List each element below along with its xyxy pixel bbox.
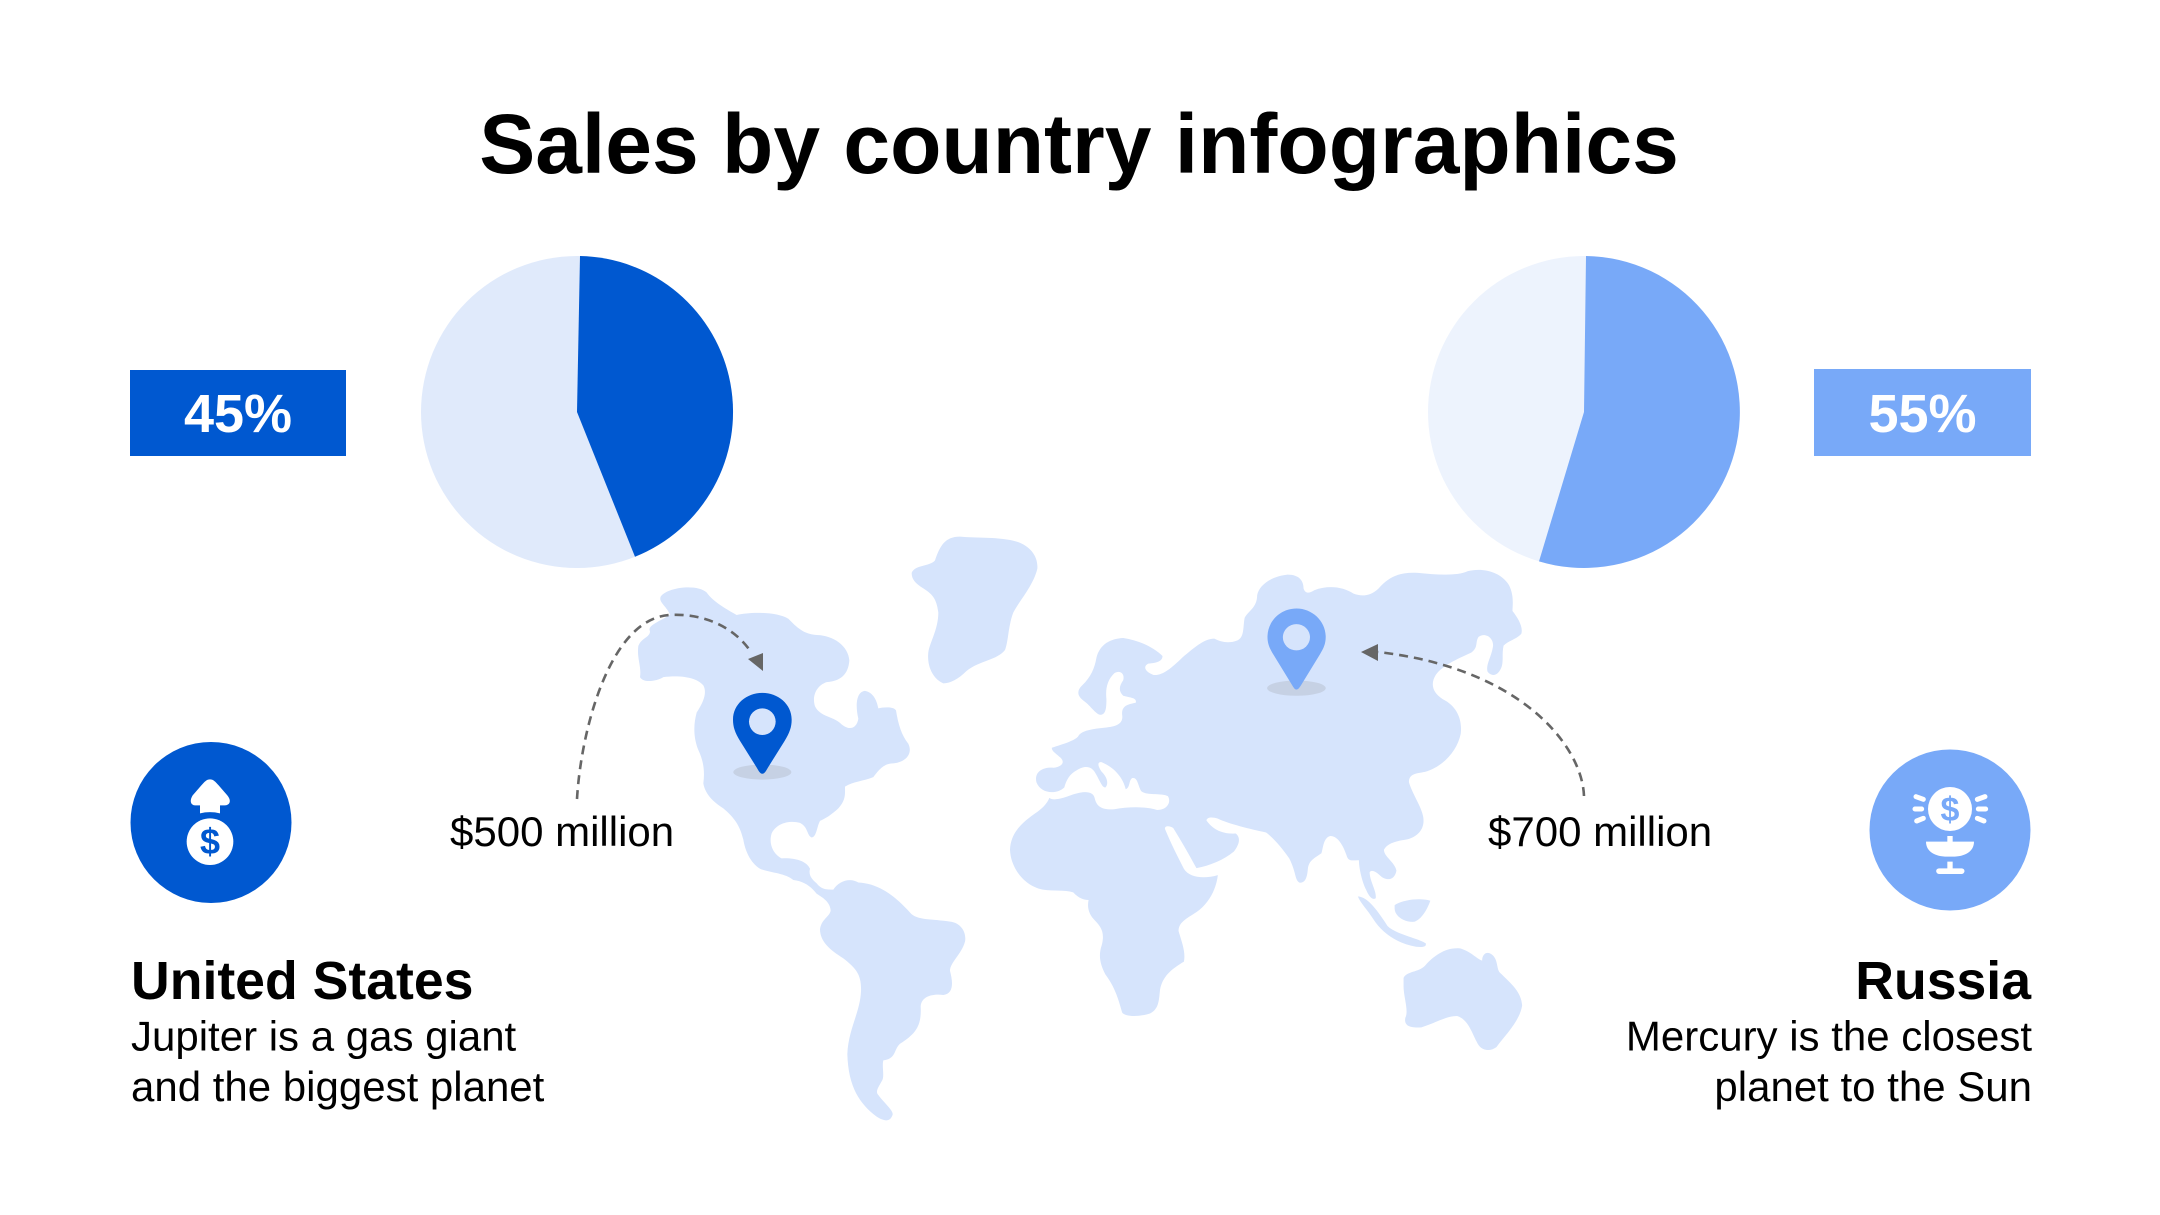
- percentage badge: 45%: [130, 370, 346, 456]
- icon: money arrow up: [130, 742, 292, 903]
- percentage badge: 55%: 55%: [1868, 384, 1977, 444]
- icon: money plant: $: [1941, 791, 1960, 829]
- pie chart: Russia 55%: [1428, 256, 1740, 568]
- label: $700 million: $700 million: [1488, 808, 1712, 855]
- percentage badge: 45%: 45%: [184, 384, 292, 444]
- text block: Russia: [1626, 951, 2032, 1110]
- world map: [638, 537, 1522, 1120]
- percentage badge: 55%: [1814, 369, 2031, 456]
- arrow: $700 million to Russia pin: [1361, 644, 1584, 796]
- arrow: $500 million to United States pin: [577, 615, 763, 799]
- label: $500 million: $500 million: [450, 808, 674, 855]
- map: Americas: [638, 587, 965, 1120]
- map pin: Russia: [1267, 609, 1326, 696]
- icon: money arrow up: $: [200, 821, 220, 862]
- text block: United States: [131, 951, 545, 1110]
- icon: money plant: [1870, 750, 2030, 910]
- map: Indonesia: [1358, 897, 1426, 947]
- text block: United States: Jupiter is a gas giant: [131, 1012, 517, 1060]
- text block: Russia: Mercury is the closest: [1626, 1012, 2032, 1060]
- title: Sales by country infographics: [479, 97, 1679, 191]
- map: Greenland: [912, 537, 1037, 683]
- map: Borneo: [1395, 899, 1430, 922]
- text block: United States: United States: [131, 951, 473, 1011]
- text block: Russia: planet to the Sun: [1714, 1063, 2032, 1110]
- map: Australia: [1404, 948, 1522, 1050]
- text block: United States: and the biggest planet: [131, 1063, 545, 1110]
- pie chart: United States 45%: [421, 256, 733, 568]
- map: Eurasia and Africa: [1010, 570, 1522, 1016]
- text block: Russia: Russia: [1855, 951, 2032, 1011]
- map pin: United States: [733, 693, 792, 780]
